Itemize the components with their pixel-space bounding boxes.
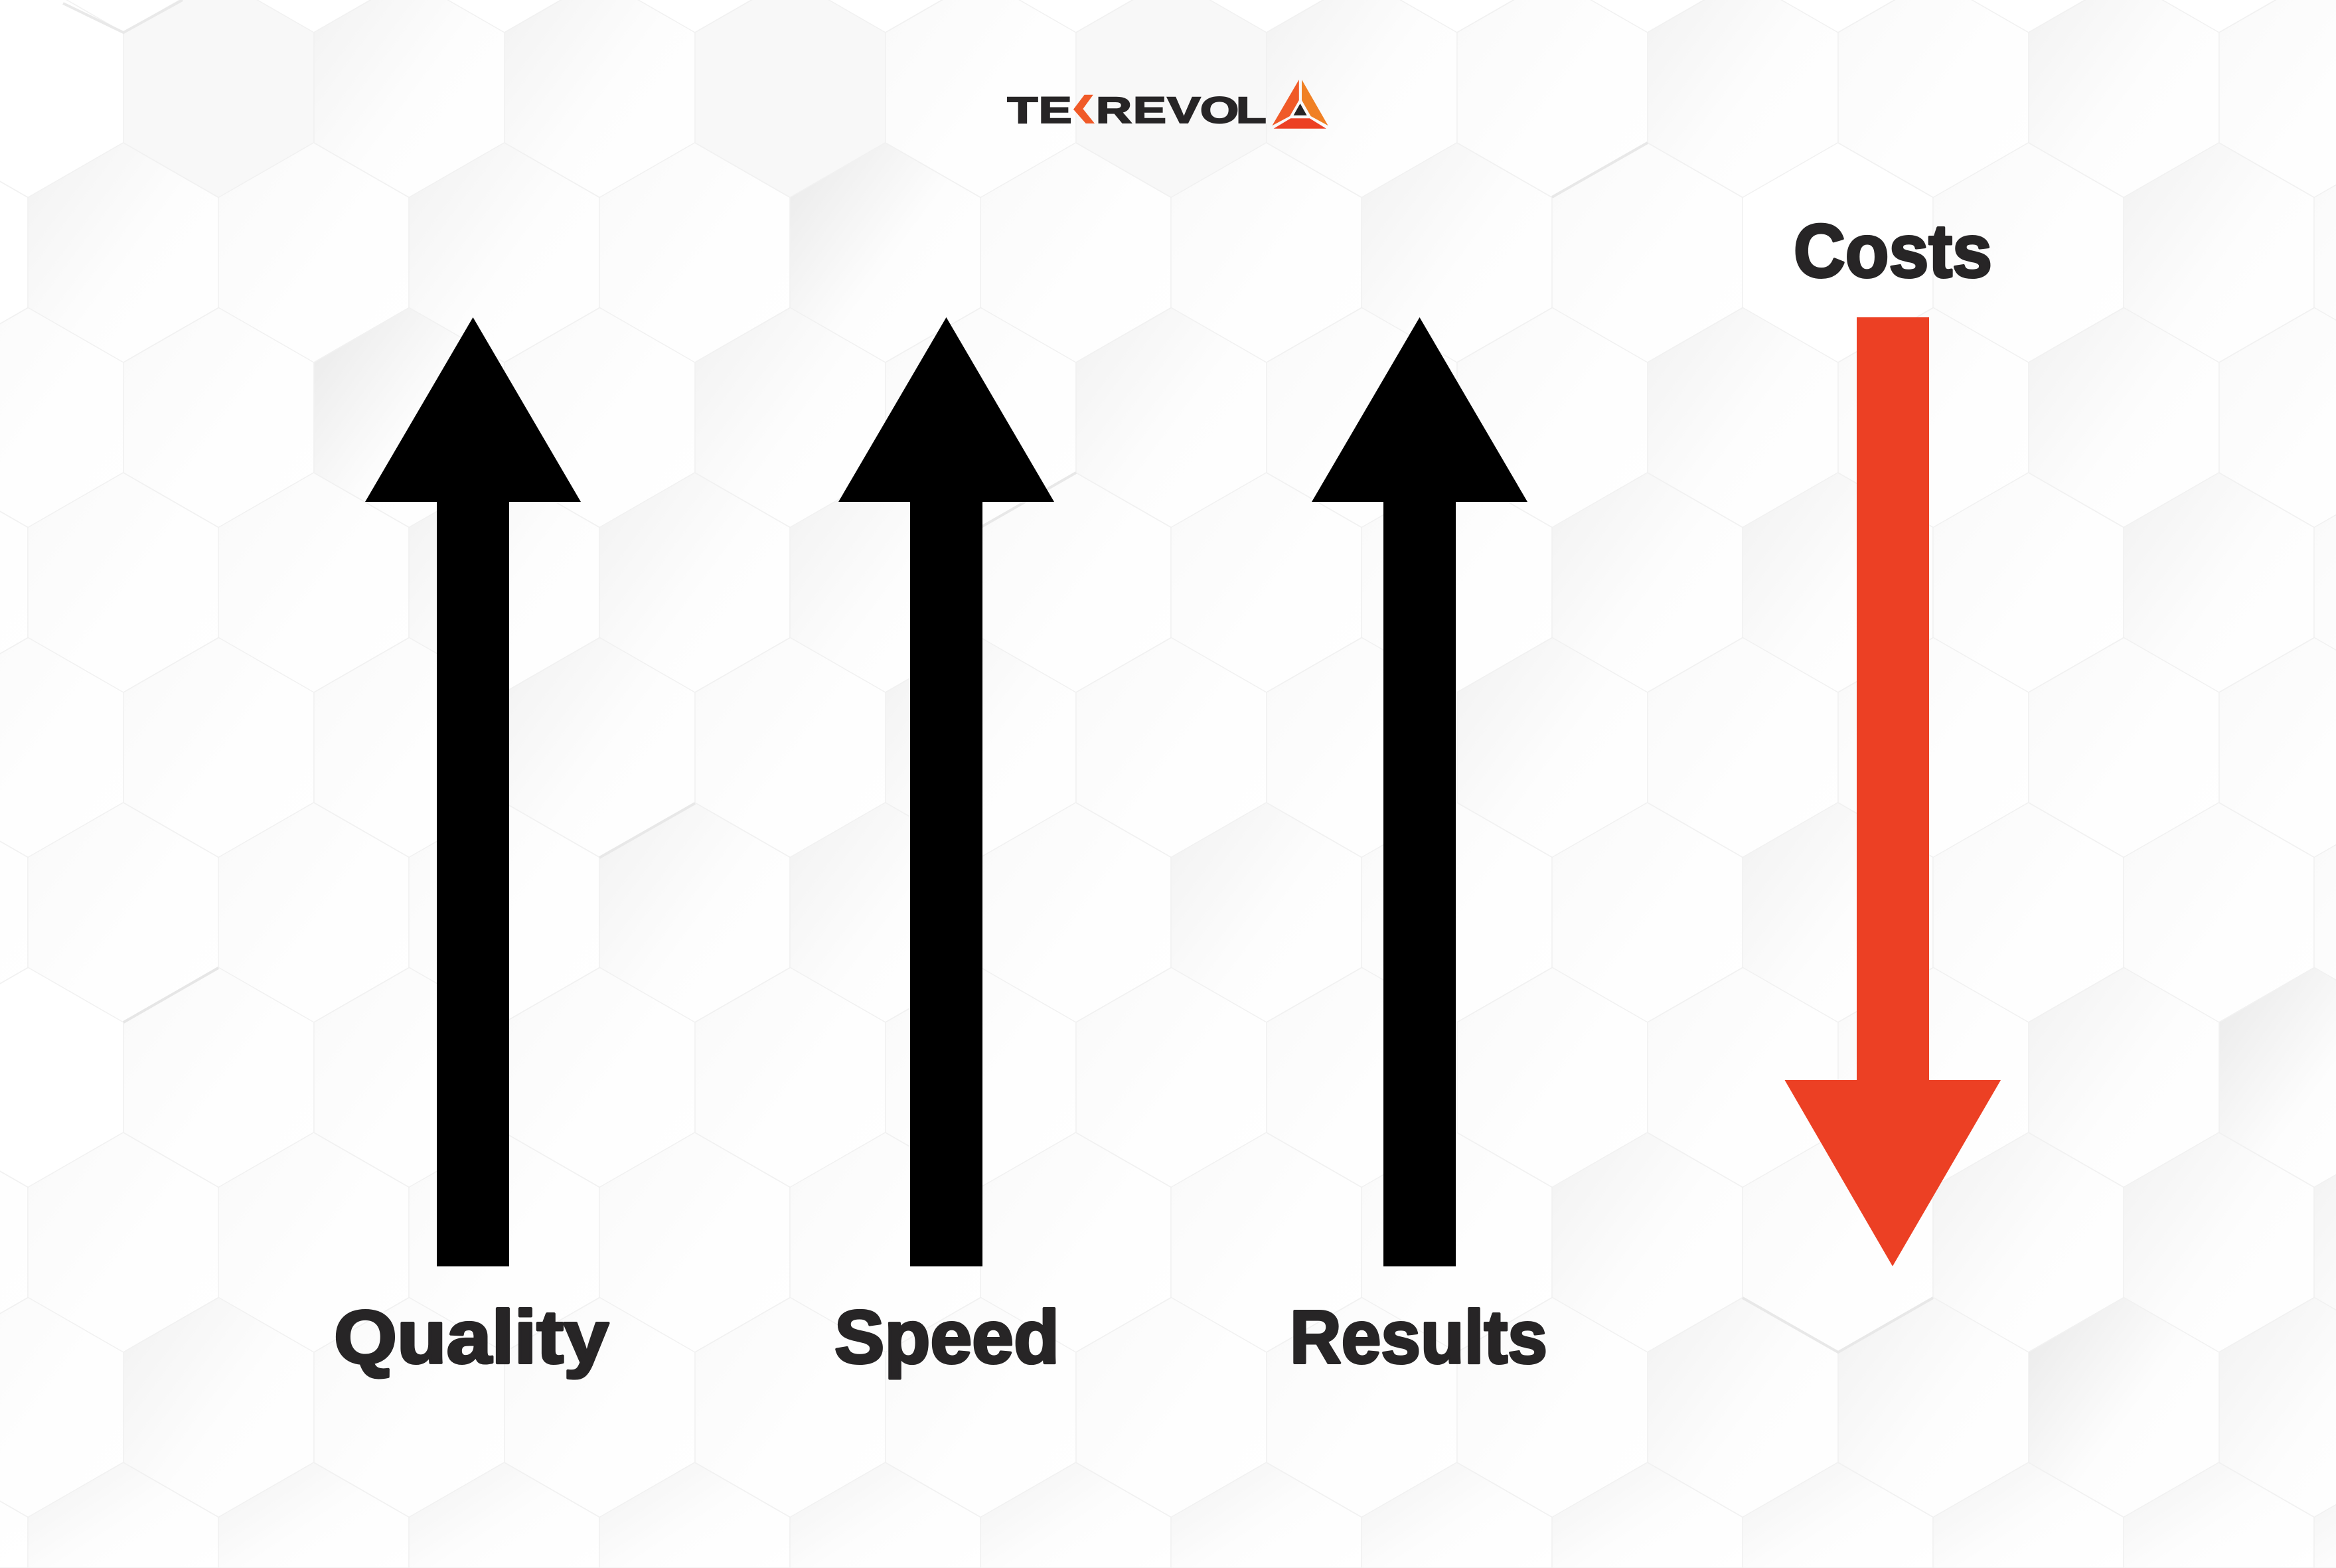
label: Results: Results: [1290, 1295, 1547, 1379]
logo wordmark: TE: TE: [1008, 90, 1072, 131]
logo wordmark: REVOL: REVOL: [1096, 90, 1267, 131]
logo: Tekrevol: [1008, 80, 1328, 131]
label: Quality: Quality: [334, 1295, 609, 1379]
arrow: results up: [1312, 317, 1527, 1267]
label: Speed: Speed: [834, 1295, 1059, 1379]
arrow: quality up: [365, 317, 581, 1267]
arrow: costs down: [1784, 317, 2001, 1267]
logo icon: triangle: [1272, 80, 1328, 129]
label: Costs: Costs: [1794, 209, 1992, 293]
logo wordmark: K chevron: [1073, 95, 1095, 123]
arrow: speed up: [838, 317, 1054, 1267]
